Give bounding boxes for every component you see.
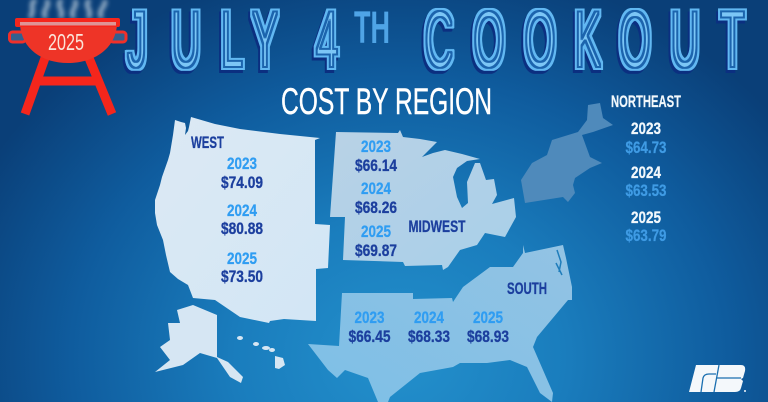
title superscript TH: TH [354,2,390,53]
West 2025: 2025 [227,249,257,268]
label: Midwest: MIDWEST [408,217,466,236]
grill rim [15,18,120,27]
South 2024: 2024 [414,308,444,327]
Northeast 2024 [626,163,666,200]
Midwest 2025 [355,222,397,260]
label: West: WEST [191,133,224,152]
label: South: SOUTH [507,279,547,298]
grill year: 2025 [48,29,84,55]
West 2023: $74.09 [221,173,263,192]
icon: red grill with smoke [10,0,126,114]
map: West [155,117,330,323]
West 2023: 2023 [227,154,257,173]
panel: West region [155,117,330,383]
Midwest 2023: 2023 [361,137,391,156]
West 2024 [221,201,263,238]
South 2025 [467,308,509,346]
South 2024: $68.33 [408,327,450,346]
West 2024: $80.88 [221,219,263,238]
South 2023: 2023 [354,308,384,327]
Northeast 2023 [626,119,666,157]
panel: South region [308,245,572,402]
Midwest 2024: 2024 [361,179,391,198]
Northeast 2025: 2025 [631,208,661,227]
South 2025: $68.93 [467,327,509,346]
Midwest 2025: 2025 [361,222,391,241]
subtitle: COST BY REGION [281,81,492,122]
West 2025 [221,249,263,286]
South 2024 [408,308,450,346]
West 2025: $73.50 [221,267,263,286]
map: Alaska [155,305,243,383]
grill legs [25,58,112,114]
smoke [30,0,105,18]
Midwest 2024: $68.26 [355,198,397,217]
icon: Farm Bureau logo [689,365,746,392]
West 2024: 2024 [227,201,257,220]
grill bowl [20,25,117,63]
Midwest 2024 [355,179,397,217]
South 2023: $66.45 [348,327,390,346]
map: Northeast [521,103,613,203]
grill handles [10,32,26,42]
South 2025: 2025 [473,308,503,327]
Northeast 2023: 2023 [631,119,661,138]
Northeast 2024: $63.53 [626,181,666,200]
Northeast 2025 [626,208,666,245]
Northeast 2023: $64.73 [626,138,666,157]
Chesapeake Bay [556,250,562,275]
Midwest 2025: $69.87 [355,241,397,260]
panel: Northeast region [521,92,681,245]
Northeast 2024: 2024 [631,163,661,182]
Midwest 2023: $66.14 [355,156,397,175]
Midwest 2023 [355,137,397,175]
map: Hawaii [237,336,285,369]
panel: Midwest region [330,130,516,270]
label: Northeast: NORTHEAST [611,92,681,111]
West 2023 [221,154,263,192]
South 2023 [348,308,390,346]
Northeast 2025: $63.79 [626,226,666,245]
map: Midwest [330,130,516,270]
map: South [308,245,572,402]
